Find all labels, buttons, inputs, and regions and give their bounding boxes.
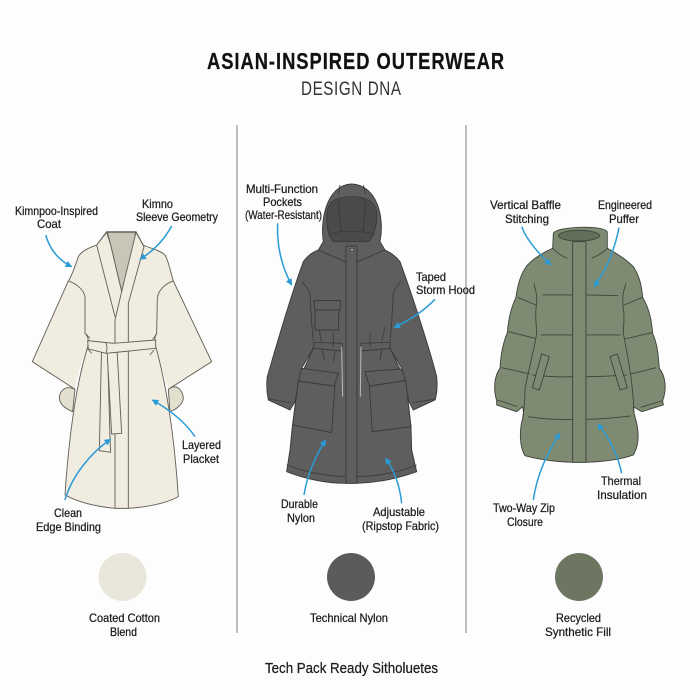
arrow: adjustable [386, 458, 402, 503]
label: kimono-inspired coat [15, 204, 98, 231]
arrow: taped storm hood [394, 299, 435, 328]
label: two-way zip closure [493, 501, 555, 529]
label: vertical baffle stitching [490, 198, 561, 226]
footer caption: Tech Pack Ready Sitholuetes [265, 660, 438, 677]
label: clean edge binding [36, 506, 101, 534]
arrow: vertical baffle stitching [522, 227, 551, 265]
label: engineered puffer: Engineered [598, 198, 652, 212]
label: engineered puffer [598, 198, 652, 226]
label: multi-function pockets: (Water-Resistant) [245, 208, 322, 222]
label: multi-function pockets: Multi-Function [246, 182, 318, 196]
label: layered placket: Layered [182, 438, 221, 452]
label: recycled synthetic fill: Synthetic Fill [545, 625, 611, 639]
arrow: durable nylon [304, 440, 326, 495]
label: coated cotton blend: Coated Cotton [89, 611, 160, 625]
label: kimono-inspired coat: Kimnpoo-Inspired [15, 204, 98, 218]
arrow: two-way zip closure [533, 433, 560, 500]
divider left [236, 125, 238, 633]
label: coated cotton blend [89, 611, 160, 639]
label: durable nylon: Durable [281, 497, 318, 511]
title: ASIAN-INSPIRED OUTERWEAR [207, 49, 504, 75]
label: layered placket [182, 438, 221, 466]
label: technical nylon: Technical Nylon [310, 611, 388, 625]
arrow: kimono-inspired coat [46, 235, 72, 267]
arrow: clean edge binding [65, 439, 111, 500]
label: kimono sleeve geometry: Kimno [142, 197, 173, 211]
label: kimono-inspired coat: Coat [37, 217, 62, 231]
label: vertical baffle stitching: Stitching [505, 212, 549, 226]
label: two-way zip closure: Closure [507, 515, 543, 529]
arrow: multi-function pockets [278, 223, 292, 285]
label: taped storm hood [416, 270, 475, 297]
illustration: parka [267, 184, 437, 483]
swatch: recycled synthetic fill [555, 553, 603, 601]
panel: technical parka [245, 182, 475, 533]
arrow: engineered puffer [594, 228, 619, 287]
subtitle: DESIGN DNA [301, 77, 401, 99]
label: thermal insulation: Insulation [597, 488, 647, 502]
label: kimono sleeve geometry: Sleeve Geometry [136, 210, 218, 224]
label: adjustable ripstop fabric [362, 505, 439, 533]
label: adjustable ripstop fabric: Adjustable [373, 505, 425, 519]
label: layered placket: Placket [183, 452, 220, 466]
panel: kimono coat [15, 197, 221, 534]
panel: engineered puffer [490, 198, 665, 529]
illustration: kimono coat [32, 232, 212, 508]
swatch: technical nylon [327, 553, 375, 601]
label: taped storm hood: Storm Hood [416, 283, 475, 297]
label: clean edge binding: Edge Binding [36, 520, 101, 534]
label: coated cotton blend: Blend [110, 625, 137, 639]
label: thermal insulation: Thermal [601, 474, 641, 488]
illustration: puffer jacket [495, 227, 665, 462]
arrow: layered placket [152, 400, 195, 437]
label: durable nylon: Nylon [287, 511, 315, 525]
label: kimono sleeve geometry [136, 197, 218, 224]
label: engineered puffer: Puffer [609, 212, 639, 226]
label: taped storm hood: Taped [416, 270, 446, 284]
label: recycled synthetic fill: Recycled [556, 611, 601, 625]
label: multi-function pockets [245, 182, 322, 222]
label: thermal insulation [597, 474, 647, 502]
label: multi-function pockets: Pockets [263, 195, 302, 209]
label: recycled synthetic fill [545, 611, 611, 639]
label: adjustable ripstop fabric: (Ripstop Fabric) [362, 519, 439, 533]
arrow: kimono sleeve geometry [140, 226, 172, 259]
arrow: thermal insulation [598, 424, 622, 473]
label: vertical baffle stitching: Vertical Baffle [490, 198, 561, 212]
divider right [465, 125, 467, 633]
swatch: coated cotton [98, 553, 146, 601]
label: durable nylon [281, 497, 318, 525]
label: clean edge binding: Clean [54, 506, 82, 520]
label: two-way zip closure: Two-Way Zip [493, 501, 555, 515]
